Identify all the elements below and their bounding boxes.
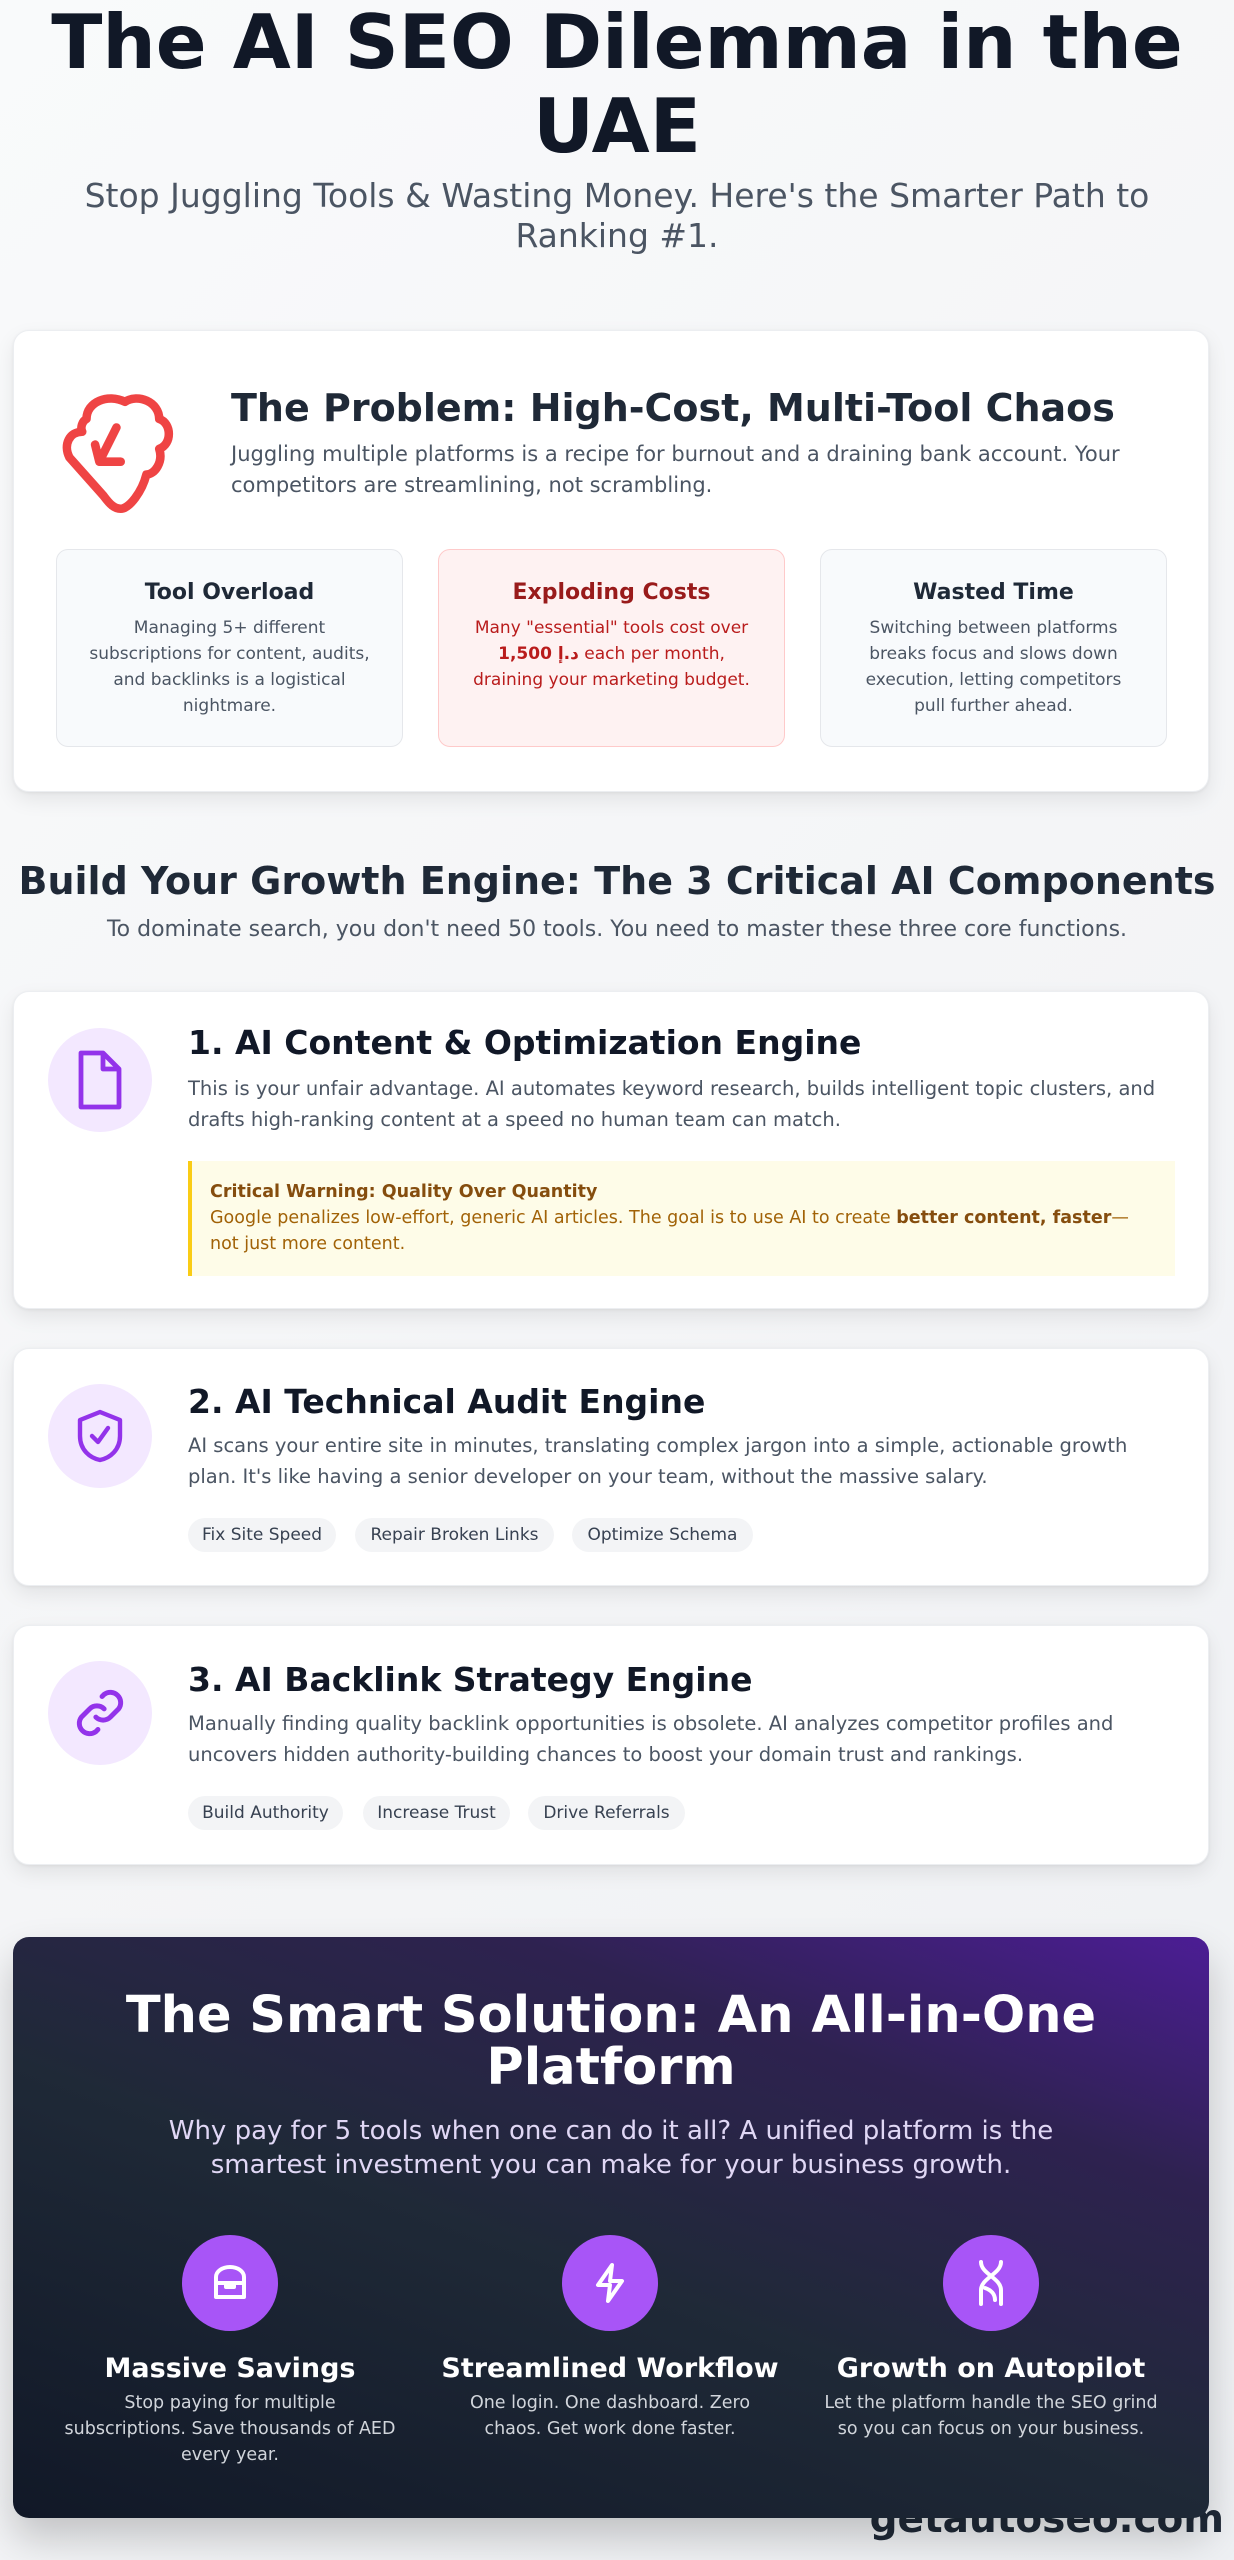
- callout: warning: Critical Warning: Quality Over Quantity: [210, 1182, 597, 1202]
- feature: savings: Massive Savings: [105, 2353, 355, 2384]
- feature: savings: subscriptions. Save thousands of AED: [65, 2419, 395, 2439]
- icon: document: [48, 1028, 152, 1132]
- features: [65, 2235, 1158, 2465]
- section heading: Build Your Growth Engine: The 3 Critical AI Components: [18, 859, 1215, 903]
- panel: problem: [13, 330, 1209, 792]
- section subtitle: To dominate search, you don't need 50 tools. You need to master these three core functions.: [107, 917, 1127, 942]
- feature: workflow: One login. One dashboard. Zero: [470, 2393, 750, 2413]
- feature: autopilot: so you can focus on your business.: [838, 2419, 1144, 2439]
- tags: Drive Referrals: [543, 1803, 670, 1823]
- tags: Repair Broken Links: [370, 1525, 539, 1545]
- box: wasted time: Wasted Time: [913, 580, 1074, 605]
- callout: warning: [188, 1161, 1175, 1276]
- tags: Increase Trust: [377, 1803, 496, 1823]
- heading: 2. AI Technical Audit Engine: [188, 1382, 705, 1421]
- intro text: Juggling multiple platforms is a recipe for burnout and a draining bank account. Your competitors are streamlining, not scrambling.: [231, 442, 1120, 497]
- feature: autopilot: [824, 2235, 1158, 2439]
- feature: savings: every year.: [181, 2445, 279, 2465]
- tags: Fix Site Speed: [202, 1525, 322, 1545]
- panel: technical audit: [13, 1348, 1209, 1586]
- icon: link: [48, 1661, 152, 1765]
- title: The AI SEO Dilemma in the UAE: [51, 0, 1183, 170]
- heading: The Problem: High-Cost, Multi-Tool Chaos: [231, 386, 1115, 430]
- icon: shield check: [48, 1384, 152, 1488]
- text: AI scans your entire site in minutes, translating complex jargon into a simple, actionable growth plan. It's like having a senior developer on your team, without the massive salary.: [188, 1434, 1127, 1488]
- text: Why pay for 5 tools when one can do it all? A unified platform is the smartest investment you can make for your business growth.: [169, 2116, 1053, 2180]
- heading: 1. AI Content & Optimization Engine: [188, 1023, 861, 1062]
- footer brand: getautoseo.com: [870, 2497, 1224, 2542]
- heading: The Smart Solution: An All-in-One Platform: [126, 1986, 1096, 2097]
- box: wasted time: Switching between platforms breaks focus and slows down execution, letting competitors pull further ahead.: [866, 618, 1121, 716]
- box: exploding costs: Exploding Costs: [513, 580, 710, 605]
- box: exploding costs: Many "essential" tools cost over 1,500 د.إ each per month, draining your marketing budget.: [473, 618, 750, 690]
- panel: smart solution: [13, 1937, 1209, 2518]
- feature: workflow: [441, 2235, 779, 2439]
- box: wasted time: [820, 549, 1167, 747]
- box: tool overload: Tool Overload: [145, 580, 314, 605]
- tags: [188, 1796, 685, 1830]
- feature: workflow: Streamlined Workflow: [441, 2353, 779, 2384]
- feature: autopilot: Let the platform handle the SEO grind: [824, 2393, 1158, 2413]
- tags: Build Authority: [202, 1803, 329, 1823]
- text: Manually finding quality backlink opportunities is obsolete. AI analyzes competitor profiles and uncovers hidden authority-building chances to boost your domain trust and rankings.: [188, 1712, 1113, 1766]
- feature: autopilot: Growth on Autopilot: [837, 2353, 1145, 2384]
- subtitle: Stop Juggling Tools & Wasting Money. Here's the Smarter Path to Ranking #1.: [85, 176, 1149, 255]
- box: tool overload: Managing 5+ different subscriptions for content, audits, and backlinks is a logistical nightmare.: [89, 618, 370, 716]
- tags: [188, 1518, 753, 1552]
- feature: savings: [65, 2235, 395, 2465]
- panel: content engine: [13, 991, 1209, 1309]
- callout: warning: Google penalizes low-effort, generic AI articles. The goal is to use AI to create better content, faster—not just more content.: [210, 1208, 1129, 1254]
- heading: 3. AI Backlink Strategy Engine: [188, 1660, 752, 1699]
- feature: savings: Stop paying for multiple: [124, 2393, 336, 2413]
- box: exploding costs: [438, 549, 785, 747]
- tags: Optimize Schema: [588, 1525, 737, 1545]
- panel: backlink strategy: [13, 1625, 1209, 1865]
- feature: workflow: chaos. Get work done faster.: [484, 2419, 736, 2439]
- text: This is your unfair advantage. AI automates keyword research, builds intelligent topic clusters, and drafts high-ranking content at a speed no human team can match.: [188, 1077, 1155, 1131]
- icon: brain with arrow: [62, 394, 174, 513]
- box: tool overload: [56, 549, 403, 747]
